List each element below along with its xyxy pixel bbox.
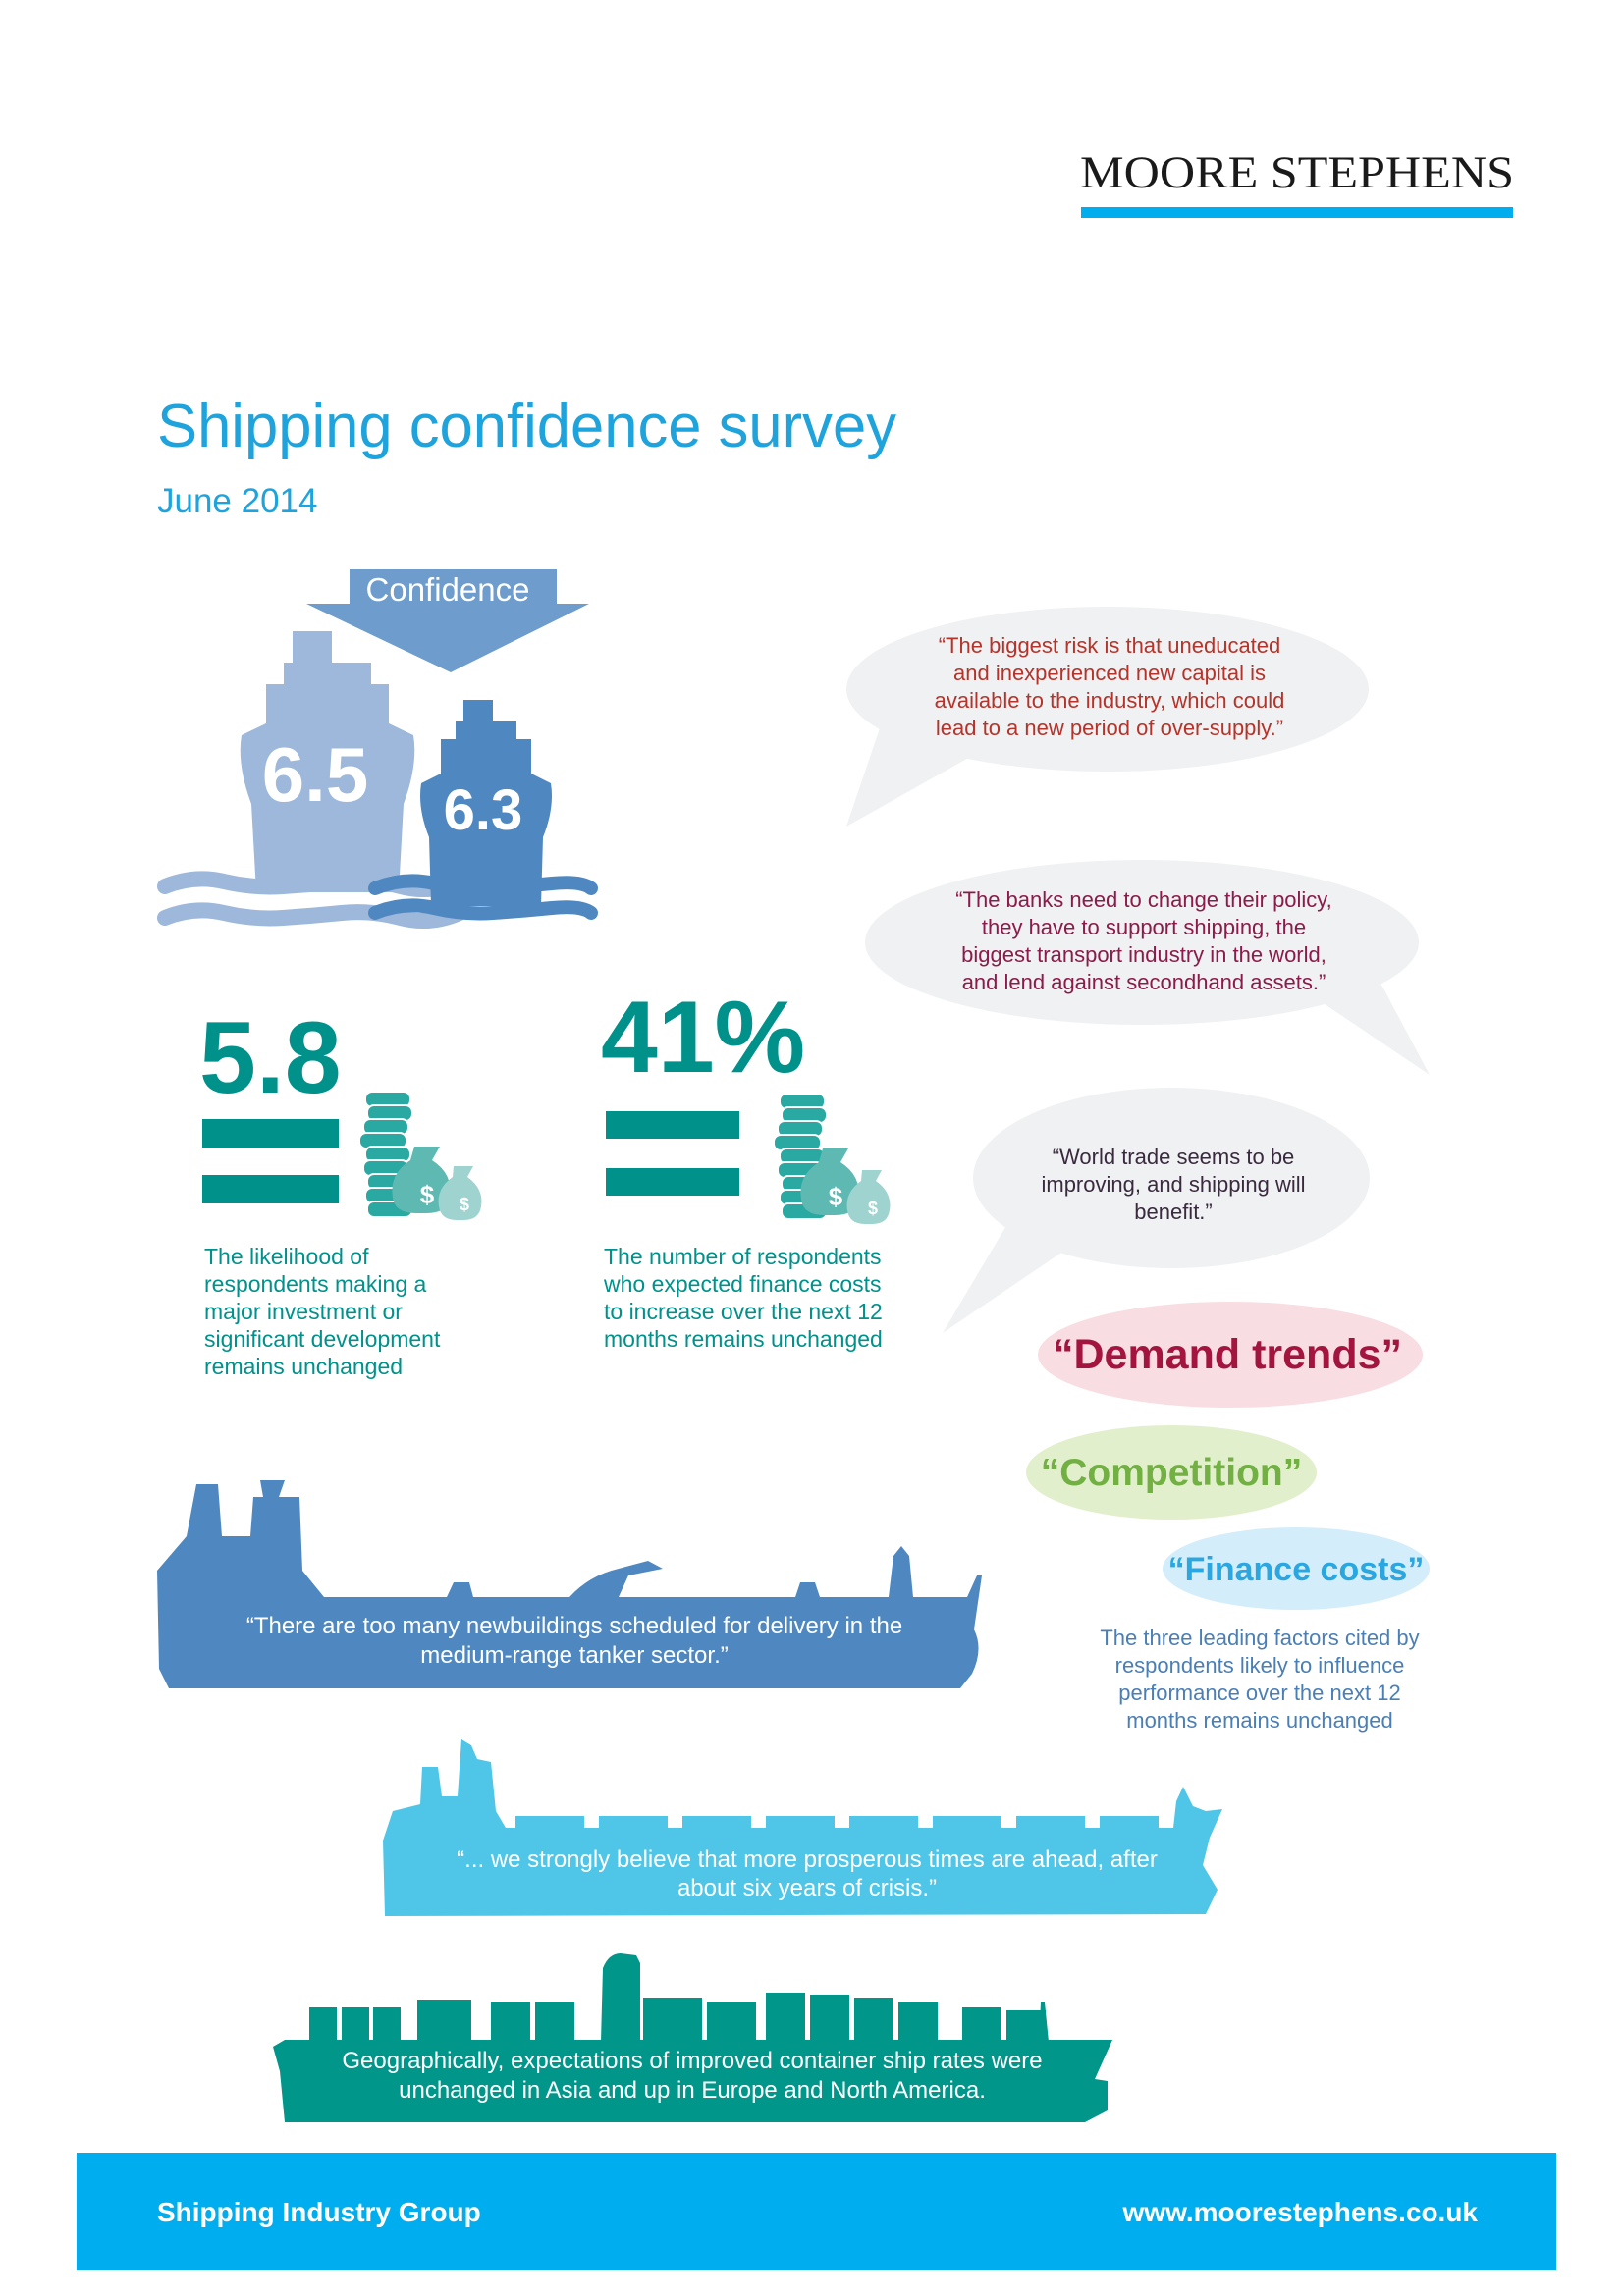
logo	[1080, 147, 1514, 218]
speech bubble 1: and inexperienced new capital is	[953, 661, 1266, 685]
ship: tanker quote: “There are too many newbuildings scheduled for delivery in the	[246, 1613, 902, 1639]
icon: ship 6.5	[165, 631, 460, 921]
ship: container ship caption: unchanged in Asia and up in Europe and North America.	[399, 2077, 986, 2104]
speech bubble 1: “The biggest risk is that uneducated	[939, 633, 1280, 658]
speech bubble 2: “The banks need to change their policy,	[955, 887, 1332, 912]
speech bubble 2: they have to support shipping, the	[982, 915, 1306, 939]
factors caption	[1100, 1626, 1420, 1733]
footer bar	[77, 2153, 1556, 2270]
stat: 41%: to increase over the next 12	[604, 1299, 883, 1324]
speech bubble 2	[865, 860, 1430, 1075]
stat: 5.8: 5.8	[199, 1001, 342, 1115]
factors caption: respondents likely to influence	[1115, 1653, 1404, 1678]
ship: container ship caption	[273, 1953, 1112, 2122]
ship: container ship caption: Geographically, expectations of improved container ship rates were	[342, 2048, 1043, 2074]
arrow: confidence down: Confidence	[366, 571, 529, 608]
stat: 5.8: respondents making a	[204, 1271, 427, 1297]
speech bubble 2: biggest transport industry in the world,	[961, 942, 1326, 967]
stat: 5.8: remains unchanged	[204, 1354, 403, 1379]
factor: Demand trends: “Demand trends”	[1053, 1331, 1402, 1378]
speech bubble 1	[846, 607, 1369, 827]
stat: 5.8: The likelihood of	[204, 1244, 369, 1269]
ship: tanker quote	[157, 1480, 982, 1688]
subtitle: date: June 2014	[157, 482, 317, 520]
stat: 41%: 41%	[601, 981, 805, 1095]
stat: 41%: The number of respondents	[604, 1244, 882, 1269]
icon: ship 6.3	[375, 700, 591, 913]
icon: coins and money bags	[774, 1094, 890, 1224]
arrow: confidence down	[306, 569, 589, 672]
factor: Competition	[1026, 1425, 1317, 1520]
factors caption: months remains unchanged	[1126, 1708, 1393, 1733]
icon: coins and money bags: $	[460, 1195, 469, 1214]
speech bubble 2: and lend against secondhand assets.”	[962, 970, 1326, 994]
factors caption: The three leading factors cited by	[1100, 1626, 1420, 1650]
factor: Competition: “Competition”	[1041, 1452, 1302, 1494]
footer bar: www.moorestephens.co.uk	[1122, 2197, 1478, 2227]
speech bubble 1: lead to a new period of over-supply.”	[936, 716, 1283, 740]
icon: coins and money bags: $	[868, 1199, 878, 1218]
footer bar: Shipping Industry Group	[157, 2197, 481, 2227]
speech bubble 1: available to the industry, which could	[935, 688, 1284, 713]
factor: Finance costs	[1163, 1527, 1430, 1610]
speech bubble 3: benefit.”	[1134, 1200, 1213, 1224]
confidence graphic	[165, 569, 591, 921]
factors caption: performance over the next 12	[1118, 1681, 1401, 1705]
speech bubble 3: “World trade seems to be	[1053, 1145, 1294, 1169]
stat: 41%	[601, 981, 890, 1352]
ship: bulk carrier quote: “... we strongly believe that more prosperous times are ahead, after	[457, 1846, 1158, 1873]
icon: coins and money bags	[359, 1092, 481, 1220]
ship: bulk carrier quote	[383, 1739, 1222, 1916]
speech bubble 3	[943, 1088, 1370, 1333]
logo: MOORE STEPHENS	[1080, 147, 1514, 198]
icon: ship 6.5: 6.5	[262, 731, 368, 818]
title: Shipping confidence survey	[157, 393, 896, 460]
stat: 41%: who expected finance costs	[603, 1271, 882, 1297]
icon: coins and money bags: $	[829, 1182, 843, 1211]
stat: 5.8: significant development	[204, 1326, 441, 1352]
stat: 41%: months remains unchanged	[604, 1326, 883, 1352]
ship: tanker quote: medium-range tanker sector.”	[420, 1642, 729, 1669]
icon: coins and money bags: $	[420, 1180, 435, 1209]
speech bubble 3: improving, and shipping will	[1041, 1172, 1306, 1197]
stat: 5.8: major investment or	[204, 1299, 403, 1324]
icon: ship 6.3: 6.3	[444, 778, 522, 842]
ship: bulk carrier quote: about six years of crisis.”	[677, 1875, 937, 1901]
factor: Finance costs: “Finance costs”	[1168, 1551, 1424, 1588]
factor: Demand trends	[1038, 1302, 1423, 1408]
stat: 5.8	[199, 1001, 481, 1379]
